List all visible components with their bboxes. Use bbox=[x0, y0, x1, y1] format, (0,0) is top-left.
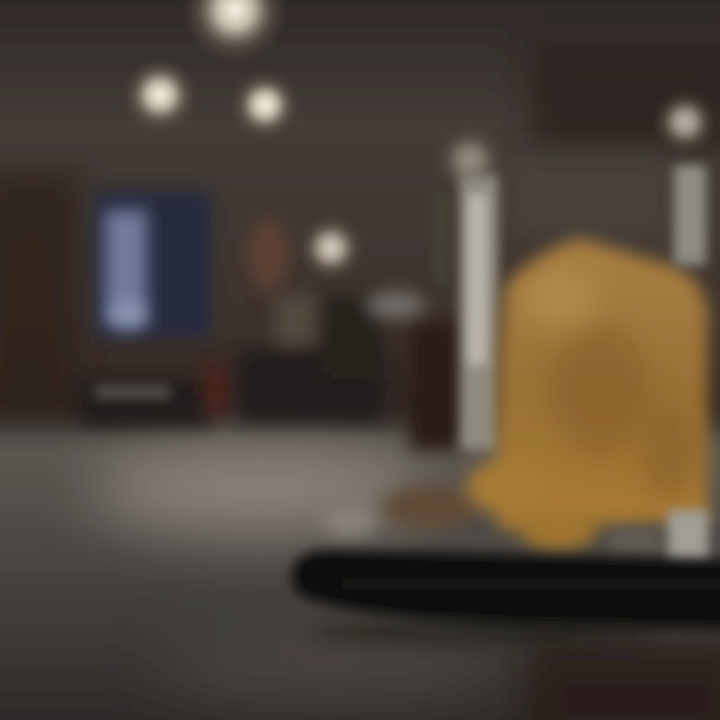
dark furniture bbox=[80, 219, 462, 450]
back wall bbox=[0, 0, 720, 460]
glass: right edge bbox=[610, 165, 708, 562]
dark tray bbox=[292, 550, 720, 644]
window bbox=[92, 190, 212, 338]
glass: left edge bbox=[438, 175, 498, 450]
golden food bbox=[324, 238, 708, 550]
floor bbox=[0, 420, 720, 720]
lights bbox=[124, 0, 717, 280]
